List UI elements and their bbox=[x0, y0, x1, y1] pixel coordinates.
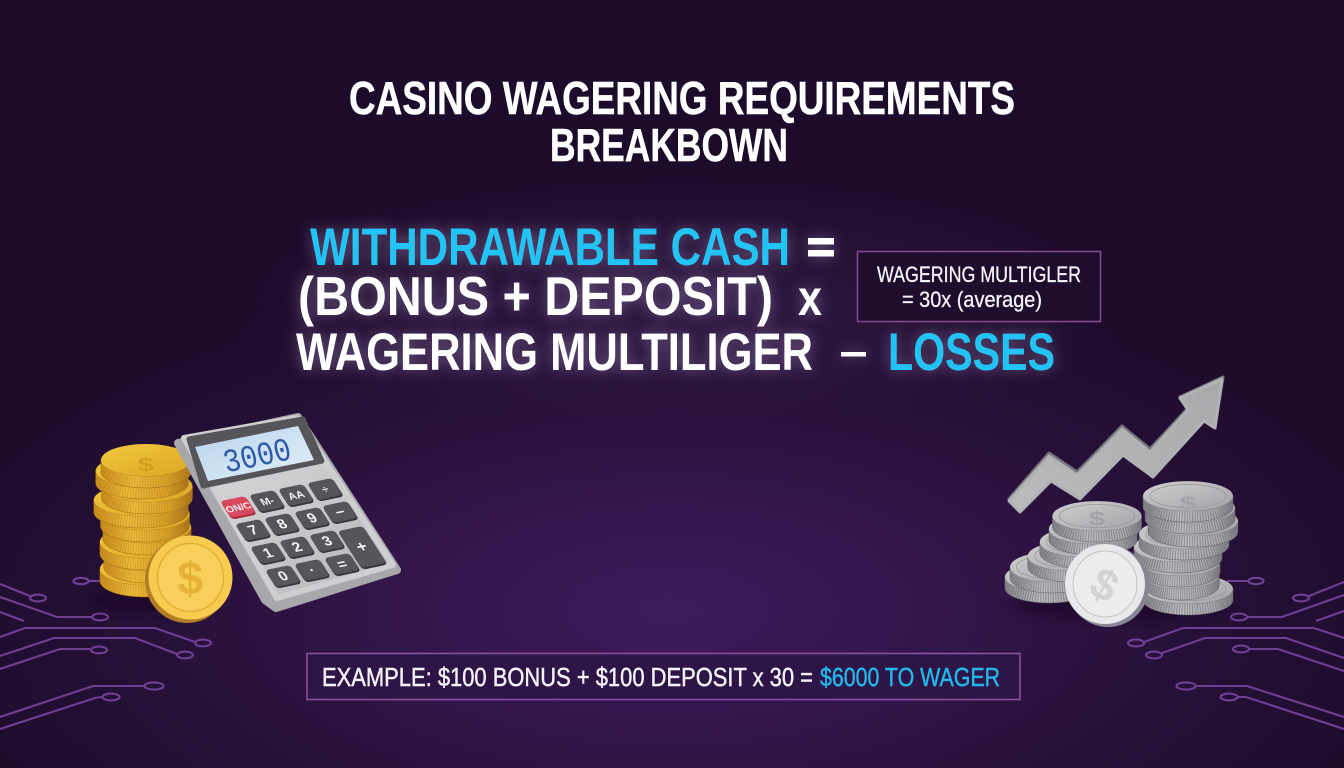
icon: front gold coin: $ bbox=[177, 552, 203, 604]
icon: front gold coin bbox=[145, 536, 232, 623]
formula: LOSSES bbox=[888, 323, 1055, 382]
back right stack bbox=[1134, 481, 1238, 615]
circuit lines left bbox=[0, 578, 211, 729]
icon: calculator bbox=[178, 417, 397, 608]
icon: front silver coin bbox=[1065, 544, 1149, 627]
calculator keys: − bbox=[332, 505, 349, 520]
callout: wagering multiplier: = 30x (average) bbox=[902, 287, 1042, 312]
formula: WITHDRAWABLE CASH bbox=[310, 218, 790, 277]
calculator screen bbox=[189, 419, 322, 486]
formula: WAGERING MULTILIGER bbox=[296, 323, 813, 382]
title: BREAKBOWN bbox=[550, 119, 788, 171]
formula: (BONUS + DEPOSIT) bbox=[298, 265, 773, 327]
icon: front silver coin: $ bbox=[1082, 558, 1127, 613]
front left stack bbox=[1005, 501, 1142, 603]
calculator keys: AA bbox=[286, 489, 308, 502]
calculator keys: 0 bbox=[275, 569, 292, 584]
icon: rising silver arrow bbox=[1009, 377, 1223, 512]
circuit lines right bbox=[1128, 578, 1344, 729]
calculator keys bbox=[220, 478, 388, 589]
calculator keys: ÷ bbox=[319, 484, 332, 495]
calculator keys: · bbox=[306, 564, 319, 578]
example panel bbox=[307, 654, 1020, 700]
front left stack: $ bbox=[1089, 508, 1105, 529]
example panel: EXAMPLE: $100 BONUS + $100 DEPOSIT x 30 = bbox=[322, 662, 813, 692]
icon: gold coin stack bbox=[90, 444, 210, 612]
title bbox=[349, 72, 1015, 171]
calculator keys: + bbox=[352, 538, 372, 556]
formula bbox=[296, 218, 1055, 382]
calculator keys: 9 bbox=[304, 511, 321, 526]
calculator keys: 3 bbox=[319, 534, 336, 549]
calculator keys: = bbox=[334, 557, 351, 572]
icon: silver coin stacks bbox=[1005, 481, 1238, 619]
calculator keys: 8 bbox=[274, 517, 291, 532]
formula: x bbox=[798, 270, 822, 326]
calculator keys: 2 bbox=[289, 540, 306, 555]
calculator keys: M- bbox=[258, 495, 277, 508]
back right stack: $ bbox=[1180, 492, 1196, 514]
calculator keys: 1 bbox=[260, 546, 277, 561]
icon: dollar on top coin: $ bbox=[138, 454, 154, 476]
calculator keys: ON/C bbox=[224, 501, 254, 515]
title: CASINO WAGERING REQUIREMENTS bbox=[349, 72, 1015, 124]
example panel: $6000 TO WAGER bbox=[820, 662, 1000, 692]
calculator screen: 3000 bbox=[220, 433, 296, 482]
callout: wagering multiplier bbox=[858, 252, 1100, 322]
calculator keys: 7 bbox=[245, 523, 262, 538]
callout: wagering multiplier: WAGERING MULTIGLER bbox=[877, 262, 1081, 287]
